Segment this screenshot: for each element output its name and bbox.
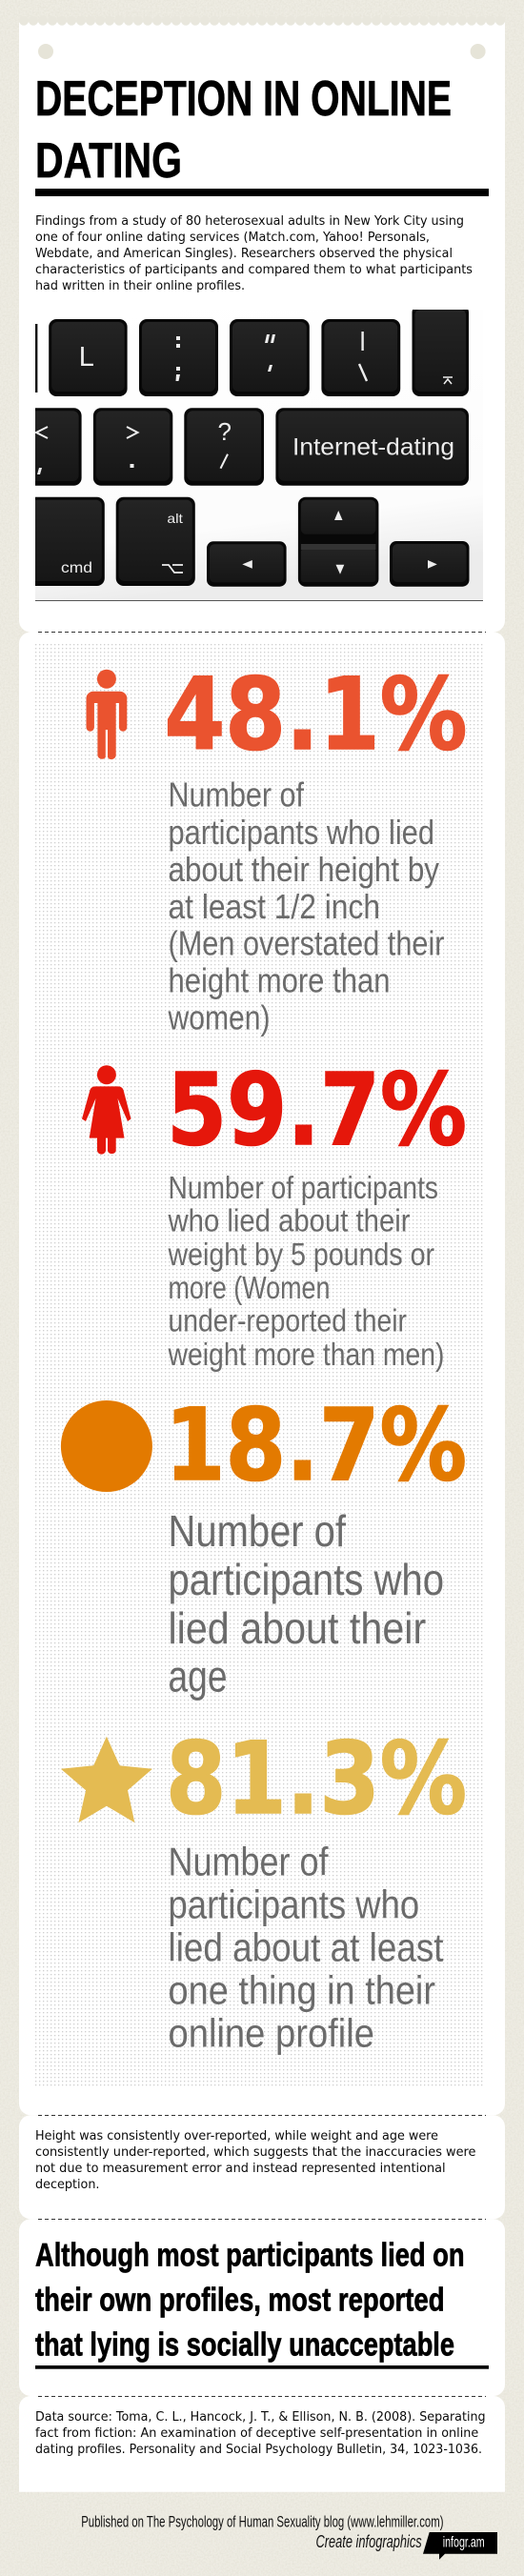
key: comma (35, 408, 82, 486)
stat: weight (82, 1052, 467, 1372)
stat: age (61, 1387, 467, 1701)
description: age: participants who (168, 1555, 444, 1604)
explanation text: Height was consistently over-reported, while weight and age were (35, 2128, 438, 2143)
description: height: women) (168, 998, 271, 1037)
description: age (168, 1506, 444, 1701)
description: age: Number of (168, 1506, 346, 1556)
description: weight: who lied about their (168, 1203, 410, 1238)
key: up and down arrows (298, 497, 378, 587)
description: overall: one thing in their (168, 1967, 435, 2012)
data source text: fact from fiction: An examination of deceptive self-presentation in online (35, 2425, 478, 2441)
description: overall: lied about at least (168, 1924, 444, 1969)
key: Internet-dating (275, 408, 469, 486)
footer: create infographics: Create infographics (316, 2532, 422, 2551)
explanation text: not due to measurement error and instead represented intentional (35, 2161, 446, 2176)
description: height: at least 1/2 inch (168, 887, 380, 926)
key: slash (184, 408, 264, 486)
intro text (35, 213, 473, 293)
key: L (49, 319, 128, 396)
key: slash: ? (217, 417, 232, 446)
description: height (168, 775, 445, 1037)
data source text: dating profiles. Personality and Social Psychology Bulletin, 34, 1023-1036. (35, 2442, 482, 2457)
stat: overall (61, 1721, 467, 2055)
description: height: height more than (168, 961, 391, 1000)
intro text: Webdate, and American Singles). Researchers observed the physical (35, 246, 453, 261)
key: left arrow (207, 541, 287, 587)
explanation text (35, 2128, 476, 2192)
title rule (35, 189, 489, 196)
intro text: Findings from a study of 80 heterosexual adults in New York City using (35, 213, 464, 229)
number: 81.3%: 81.3% (166, 1721, 467, 1837)
key: quote (230, 319, 310, 396)
key: alt (116, 497, 195, 586)
panel: explanation card (19, 2115, 505, 2219)
footer: infogr.am badge: infogr.am (443, 2534, 485, 2550)
description: height: (Men overstated their (168, 924, 445, 963)
panel: source card (19, 2396, 505, 2492)
icon: star (61, 1737, 152, 1822)
description: weight: Number of participants (168, 1170, 438, 1205)
key: cmd (35, 497, 105, 586)
description: weight (168, 1170, 444, 1372)
data source text (35, 2409, 486, 2457)
description: age: age (168, 1652, 227, 1701)
description: weight: weight by 5 pounds or (168, 1237, 434, 1272)
description: overall (168, 1840, 444, 2055)
icon: man (86, 670, 127, 759)
key: right arrow (390, 541, 469, 587)
description: height: participants who lied (168, 813, 434, 852)
intro text: had written in their online profiles. (35, 278, 245, 293)
number: 18.7%: 18.7% (165, 1387, 467, 1503)
title: DATING (35, 133, 182, 189)
data source text: Data source: Toma, C. L., Hancock, J. T., & Ellison, N. B. (2008). Separating (35, 2409, 486, 2425)
key: page up (412, 305, 469, 396)
stat: height (86, 656, 467, 1037)
panel: conclusion card (19, 2219, 505, 2396)
key: partial left (35, 324, 37, 392)
icon: circle (61, 1400, 152, 1492)
explanation text: deception. (35, 2177, 99, 2192)
number: 48.1%: 48.1% (164, 656, 467, 773)
dotted background panel (35, 644, 483, 2088)
icon: woman (82, 1065, 131, 1155)
description: weight: under-reported their (168, 1303, 407, 1338)
intro text: characteristics of participants and compared them to what participants (35, 262, 473, 277)
description: age: lied about their (168, 1603, 426, 1653)
key: semicolon (139, 319, 218, 396)
dashed dividers (38, 633, 486, 2397)
conclusion rule (35, 2365, 489, 2369)
key: cmd: cmd (61, 560, 92, 576)
description: overall: participants who (168, 1882, 419, 1926)
key: period (93, 408, 172, 486)
key: Internet-dating: Internet-dating (292, 433, 454, 460)
panel: statistics card (19, 633, 505, 2115)
conclusion heading (35, 2237, 465, 2363)
description: overall: Number of (168, 1840, 329, 1884)
description: overall: online profile (168, 2010, 374, 2055)
keyboard photo (35, 305, 483, 601)
title (35, 71, 452, 189)
key: backslash (321, 319, 400, 396)
description: weight: more (Women (168, 1270, 330, 1305)
panel: header card (19, 16, 505, 632)
icon: punch hole right (471, 44, 486, 59)
key: alt: alt (167, 511, 183, 526)
description: height: about their height by (168, 850, 439, 889)
icon: punch hole left (38, 44, 53, 59)
description: weight: weight more than men) (168, 1337, 444, 1372)
intro text: one of four online dating services (Match.com, Yahoo! Personals, (35, 230, 430, 245)
explanation text: consistently under-reported, which suggests that the inaccuracies were (35, 2144, 476, 2160)
footer: infogr.am badge (423, 2532, 497, 2560)
description: height: Number of (168, 775, 305, 815)
key: L: L (79, 342, 94, 372)
number: 59.7%: 59.7% (167, 1052, 467, 1168)
